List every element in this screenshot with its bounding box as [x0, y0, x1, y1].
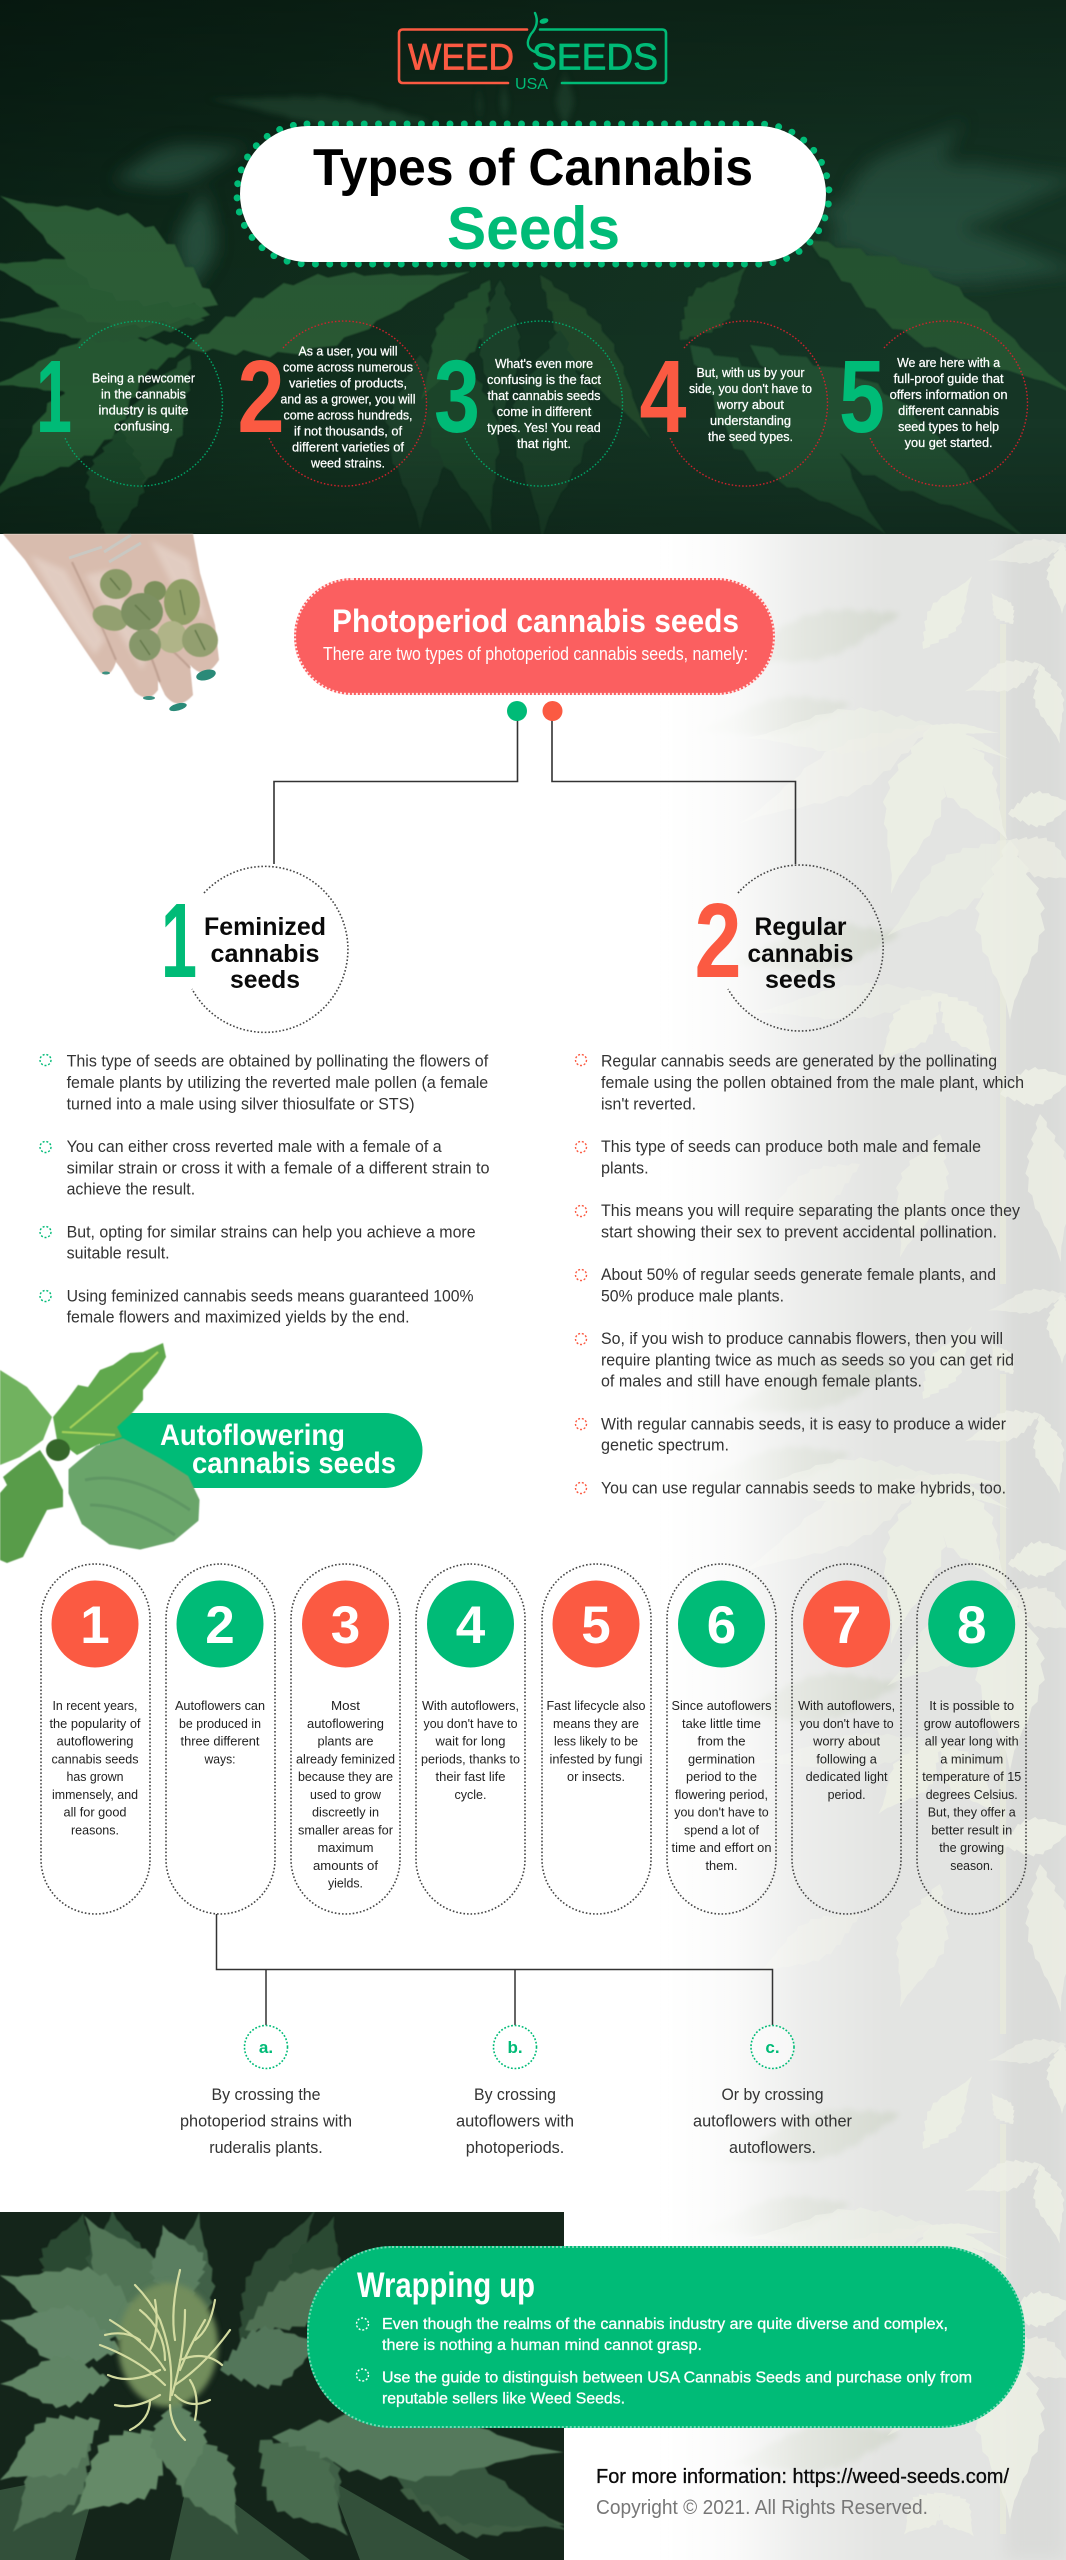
autoflowering card 7: 7 — [832, 1596, 861, 1655]
autoflowering card 1: In recent years, — [52, 1698, 138, 1713]
heading: regular cannabis seeds: Regular — [754, 913, 847, 941]
regular bullet list: Regular cannabis seeds are generated by the pollinating — [601, 1053, 997, 1071]
intro item 5: different cannabis — [898, 404, 999, 418]
regular bullet list: of males and still have enough female plants. — [601, 1373, 922, 1391]
autoflowering card 1: immensely, and — [52, 1787, 138, 1802]
autoflowering card 5: Fast lifecycle also — [546, 1698, 646, 1713]
autoflowering card 6: you don't have to — [674, 1804, 769, 1820]
option a: photoperiod strains with — [180, 2112, 352, 2130]
autoflowering card 5: means they are — [553, 1716, 639, 1731]
autoflowering card 3: yields. — [328, 1876, 363, 1890]
feminized bullet list: Using feminized cannabis seeds means guaranteed 100% — [67, 1287, 474, 1305]
autoflowering card 3 — [291, 1564, 400, 1914]
autoflowering card 5: infested by fungi — [550, 1751, 643, 1766]
autoflowering card 2: 2 — [205, 1596, 235, 1655]
regular bullet list: require planting twice as much as seeds so you can get rid — [601, 1351, 1014, 1369]
intro item 1: in the cannabis — [101, 388, 186, 402]
autoflowering card 6: 6 — [707, 1596, 736, 1655]
wrapping up panel: reputable sellers like Weed Seeds. — [382, 2390, 625, 2408]
intro item 1: 1 — [36, 339, 72, 454]
option b: By crossing — [474, 2085, 556, 2104]
heading: feminized cannabis seeds: 1 — [161, 882, 197, 1000]
autoflowering card 6: time and effort on — [672, 1840, 772, 1855]
photoperiod heading pill: Photoperiod cannabis seeds — [332, 603, 739, 639]
connector tree: card 2 to options — [216, 1914, 772, 2025]
intro item 1 — [36, 321, 222, 486]
autoflowering card 6 — [667, 1564, 776, 1914]
autoflowering card 5: 5 — [581, 1596, 611, 1655]
regular bullet list — [576, 1053, 1024, 1497]
autoflowering card 8: But, they offer a — [928, 1804, 1016, 1820]
intro item 3: What's even more — [495, 357, 593, 371]
autoflowering card 8: the growing — [939, 1840, 1004, 1855]
autoflowering card 8: 8 — [957, 1596, 986, 1655]
autoflowering card 8: season. — [950, 1858, 993, 1873]
feminized bullet list: suitable result. — [67, 1245, 170, 1263]
logo: Weed Seeds USA: WEED — [408, 36, 514, 78]
option c: Or by crossing — [722, 2085, 824, 2104]
autoflowering card 1: the popularity of — [50, 1716, 141, 1731]
autoflowering card 1 — [41, 1564, 150, 1914]
intro item 3: come in different — [497, 405, 592, 419]
autoflowering card 2: be produced in — [179, 1716, 261, 1731]
intro item 5: you get started. — [905, 436, 993, 450]
connector: photoperiod to feminized — [274, 701, 527, 864]
connector: photoperiod to regular — [542, 701, 796, 864]
autoflowering card 7: period. — [828, 1787, 866, 1802]
autoflowering card 3: amounts of — [313, 1858, 378, 1873]
autoflowering card 8: degrees Celsius. — [926, 1787, 1018, 1802]
intro item 4: 4 — [640, 339, 686, 454]
autoflowering card 1: cannabis seeds — [52, 1751, 139, 1766]
feminized bullet list: turned into a male using silver thiosulfate or STS) — [67, 1095, 415, 1113]
autoflowering card 6: spend a lot of — [684, 1822, 759, 1837]
autoflowering card 3: already feminized — [296, 1751, 395, 1766]
intro item 1: confusing. — [114, 419, 173, 433]
intro item 4: understanding — [710, 414, 791, 428]
option b: b. — [507, 2038, 523, 2057]
autoflowering card 5: less likely to be — [554, 1734, 638, 1748]
autoflowering card 5 — [542, 1564, 651, 1914]
autoflowering card 8: better result in — [931, 1822, 1012, 1837]
footer: more information: For more information: https://weed-seeds.com/ — [596, 2466, 1009, 2488]
autoflowering card 6: flowering period, — [675, 1787, 768, 1802]
wrapping up panel: Even though the realms of the cannabis industry are quite diverse and complex, — [382, 2316, 948, 2333]
feminized bullet list: You can either cross reverted male with a female of a — [67, 1138, 442, 1156]
autoflowering card 8: It is possible to — [929, 1698, 1014, 1713]
autoflowering card 6: germination — [688, 1751, 755, 1766]
footer: copyright: Copyright © 2021. All Rights Reserved. — [596, 2497, 928, 2519]
autoflowering card 7: worry about — [812, 1734, 880, 1748]
feminized bullet list: But, opting for similar strains can help you achieve a more — [67, 1223, 476, 1241]
intro item 3: 3 — [434, 339, 480, 454]
intro item 2 — [238, 321, 426, 486]
autoflowering card 4: 4 — [456, 1596, 486, 1655]
option c — [693, 2026, 852, 2157]
autoflowering card 3: autoflowering — [307, 1716, 384, 1731]
photo: cannabis flower — [0, 2193, 579, 2560]
regular bullet list: This type of seeds can produce both male and female — [601, 1138, 981, 1156]
autoflowering card 1: autoflowering — [56, 1734, 134, 1748]
autoflowering card 3: used to grow — [310, 1787, 382, 1802]
regular bullet list: So, if you wish to produce cannabis flowers, then you will — [601, 1330, 1003, 1348]
autoflowering card 6: Since autoflowers — [672, 1698, 772, 1713]
autoflowering card 6: them. — [706, 1858, 738, 1873]
autoflowering card 8 — [917, 1564, 1026, 1914]
regular bullet list: start showing their sex to prevent accidental pollination. — [601, 1223, 997, 1241]
title pill — [237, 124, 829, 264]
autoflowering card 6: from the — [698, 1734, 746, 1748]
title pill: Seeds — [447, 195, 620, 262]
autoflowering card 6: take little time — [682, 1716, 761, 1731]
intro item 3: confusing is the fact — [487, 373, 602, 387]
intro item 3 — [434, 321, 622, 486]
option a: ruderalis plants. — [209, 2138, 323, 2157]
autoflowering card 3: maximum — [318, 1840, 374, 1855]
intro item 2: different varieties of — [292, 440, 404, 454]
heading: regular cannabis seeds: 2 — [694, 882, 742, 1000]
autoflowering card 3: 3 — [331, 1596, 360, 1655]
autoflowering card 4 — [416, 1564, 525, 1914]
autoflowering card 4: cycle. — [454, 1787, 486, 1802]
autoflowering card 3: plants are — [318, 1734, 374, 1748]
intro item 4: side, you don't have to — [689, 382, 812, 396]
autoflowering card 4: you don't have to — [424, 1716, 518, 1731]
logo: Weed Seeds USA: USA — [515, 76, 548, 93]
wrapping up panel: Use the guide to distinguish between USA Cannabis Seeds and purchase only from — [382, 2370, 972, 2386]
logo: Weed Seeds USA: SEEDS — [532, 36, 658, 78]
autoflowering card 7: following a — [816, 1751, 878, 1766]
autoflowering card 8: temperature of 15 — [922, 1769, 1021, 1784]
autoflowering card 4: periods, thanks to — [421, 1751, 520, 1766]
regular bullet list: With regular cannabis seeds, it is easy to produce a wider — [601, 1415, 1007, 1433]
autoflowering heading pill — [100, 1413, 423, 1488]
intro item 5: We are here with a — [897, 356, 1000, 370]
autoflowering card 6: period to the — [686, 1769, 757, 1784]
autoflowering card 3: because they are — [298, 1769, 393, 1784]
option a: a. — [259, 2038, 273, 2057]
heading: feminized cannabis seeds: Feminized — [204, 913, 326, 941]
intro item 2: weed strains. — [310, 456, 385, 470]
intro item 5: 5 — [839, 339, 885, 454]
intro item 2: come across hundreds, — [284, 408, 412, 422]
wrapping up panel — [307, 2246, 1025, 2428]
autoflowering card 2: Autoflowers can — [175, 1698, 265, 1713]
feminized bullet list: achieve the result. — [67, 1181, 195, 1199]
autoflowering card 7: dedicated light — [806, 1769, 888, 1784]
heading: feminized cannabis seeds: seeds — [230, 966, 300, 994]
intro item 3: that right. — [517, 437, 571, 451]
autoflowering card 8: grow autoflowers — [924, 1716, 1020, 1731]
hero photo background — [0, 0, 1066, 571]
intro item 2: 2 — [238, 339, 284, 454]
intro item 1: industry is quite — [98, 404, 188, 418]
autoflowering card 3: Most — [331, 1698, 360, 1713]
regular bullet list: About 50% of regular seeds generate female plants, and — [601, 1266, 996, 1284]
option b — [456, 2026, 574, 2157]
intro item 2: and as a grower, you will — [280, 392, 416, 406]
heading: feminized cannabis seeds — [161, 866, 348, 1032]
regular bullet list: You can use regular cannabis seeds to make hybrids, too. — [601, 1479, 1006, 1497]
intro item 3: types. Yes! You read — [487, 421, 601, 435]
option a — [180, 2026, 352, 2157]
feminized bullet list: This type of seeds are obtained by pollinating the flowers of — [67, 1053, 489, 1071]
autoflowering card 4: wait for long — [435, 1734, 506, 1748]
feminized bullet list: female flowers and maximized yields by the end. — [67, 1309, 410, 1327]
feminized bullet list — [40, 1053, 490, 1327]
wrapping up panel: there is nothing a human mind cannot grasp. — [382, 2337, 702, 2354]
regular bullet list: genetic spectrum. — [601, 1437, 729, 1455]
regular bullet list: isn't reverted. — [601, 1095, 696, 1113]
autoflowering card 8: a minimum — [940, 1751, 1003, 1766]
autoflowering card 7: With autoflowers, — [798, 1698, 895, 1713]
autoflowering card 2 — [166, 1564, 275, 1914]
option c: autoflowers. — [729, 2138, 816, 2157]
autoflowering card 2: ways: — [204, 1751, 236, 1766]
faded cannabis leaves background on right — [730, 534, 1066, 2560]
autoflowering heading pill: cannabis seeds — [192, 1447, 396, 1480]
autoflowering card 4: their fast life — [436, 1769, 506, 1784]
option a: By crossing the — [212, 2085, 320, 2104]
icon: young green plant — [0, 1343, 198, 1563]
wrapping up panel: Wrapping up — [357, 2266, 535, 2305]
autoflowering card 1: has grown — [66, 1769, 124, 1784]
regular bullet list: 50% produce male plants. — [601, 1287, 784, 1305]
intro item 5: seed types to help — [898, 420, 999, 434]
intro item 3: that cannabis seeds — [488, 389, 600, 403]
autoflowering card 7: you don't have to — [800, 1716, 894, 1731]
option b: photoperiods. — [466, 2138, 564, 2157]
intro item 2: As a user, you will — [298, 344, 398, 358]
intro item 4: worry about — [716, 398, 784, 412]
option c: autoflowers with other — [693, 2112, 852, 2130]
feminized bullet list: female plants by utilizing the reverted male pollen (a female — [67, 1074, 488, 1092]
autoflowering card 5: or insects. — [567, 1769, 625, 1784]
feminized bullet list: similar strain or cross it with a female of a different strain to — [67, 1159, 490, 1177]
autoflowering card 1: 1 — [80, 1596, 110, 1655]
autoflowering heading pill: Autoflowering — [160, 1419, 345, 1452]
photoperiod heading pill — [294, 578, 775, 695]
option c: c. — [765, 2038, 780, 2057]
regular bullet list: female using the pollen obtained from the male plant, which — [601, 1074, 1024, 1092]
photo: hand holding cannabis buds — [3, 534, 219, 713]
autoflowering card 4: With autoflowers, — [422, 1698, 519, 1713]
regular bullet list: plants. — [601, 1159, 649, 1177]
intro item 1: Being a newcomer — [92, 372, 195, 386]
heading: regular cannabis seeds — [694, 865, 883, 1031]
heading: feminized cannabis seeds: cannabis — [210, 940, 320, 968]
intro item 5 — [839, 321, 1027, 486]
intro item 5: offers information on — [890, 388, 1008, 402]
autoflowering card 1: all for good — [64, 1804, 126, 1820]
intro item 2: if not thousands, of — [294, 424, 403, 438]
intro item 5: full-proof guide that — [894, 372, 1004, 386]
heading: regular cannabis seeds: seeds — [765, 966, 836, 994]
intro item 2: varieties of products, — [289, 376, 407, 390]
intro item 4: the seed types. — [708, 430, 793, 444]
autoflowering card 7 — [792, 1564, 901, 1914]
logo: Weed Seeds USA — [399, 13, 666, 93]
heading: regular cannabis seeds: cannabis — [748, 940, 854, 968]
option b: autoflowers with — [456, 2112, 574, 2130]
intro item 4: But, with us by your — [696, 366, 804, 380]
intro item 4 — [640, 321, 827, 486]
photoperiod heading pill: There are two types of photoperiod cannabis seeds, namely: — [323, 643, 748, 664]
autoflowering card 3: smaller areas for — [298, 1822, 394, 1837]
autoflowering card 8: all year long with — [925, 1734, 1019, 1748]
regular bullet list: This means you will require separating the plants once they — [601, 1202, 1021, 1220]
autoflowering card 2: three different — [180, 1734, 260, 1748]
intro item 2: come across numerous — [283, 360, 413, 374]
autoflowering card 1: reasons. — [71, 1822, 119, 1837]
autoflowering card 3: discreetly in — [312, 1804, 379, 1820]
title pill: Types of Cannabis — [313, 139, 753, 197]
